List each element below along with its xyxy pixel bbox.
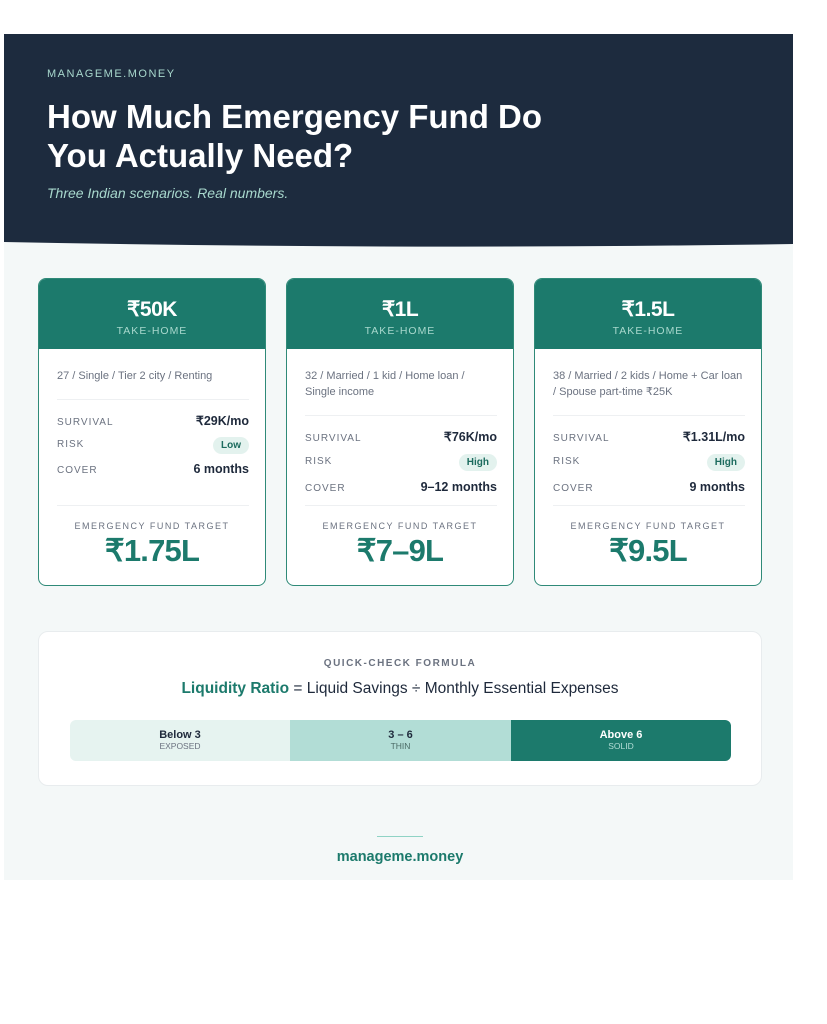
cover row: 9 months — [689, 480, 745, 494]
cover row — [305, 480, 497, 494]
risk row: RISK — [57, 439, 84, 450]
target label: EMERGENCY FUND TARGET — [570, 521, 726, 531]
cover row: COVER — [553, 483, 594, 494]
risk row: High — [467, 456, 489, 468]
card header — [287, 279, 513, 349]
description: 38 / Married / 2 kids / Home + Car loan / Spouse part-time ₹25K — [553, 370, 742, 398]
segment thin — [290, 720, 511, 761]
card header: TAKE-HOME — [117, 325, 187, 337]
segment solid — [511, 720, 731, 761]
survival row: SURVIVAL — [553, 433, 610, 444]
segment thin: 3 – 6 — [388, 729, 413, 741]
card header — [535, 279, 761, 349]
segment thin: THIN — [391, 741, 410, 751]
risk row: Low — [221, 440, 241, 450]
card header: ₹1.5L — [622, 298, 674, 321]
title: How Much Emergency Fund Do — [47, 98, 542, 135]
target value: ₹7–9L — [357, 533, 443, 568]
panel: card 50K — [38, 278, 266, 586]
segment solid: Above 6 — [600, 729, 642, 741]
segment exposed — [70, 720, 290, 761]
footer brand: manageme.money — [337, 849, 463, 865]
ratio scale bar — [70, 720, 731, 761]
target label: EMERGENCY FUND TARGET — [74, 521, 230, 531]
survival row: ₹76K/mo — [444, 430, 497, 444]
cover row: COVER — [57, 465, 98, 476]
risk row: RISK — [553, 456, 580, 467]
risk row: RISK — [305, 456, 332, 467]
cover row: COVER — [305, 483, 346, 494]
risk row — [305, 454, 497, 471]
segment solid: SOLID — [608, 741, 634, 751]
risk row — [553, 454, 745, 471]
survival row — [305, 430, 497, 444]
card header: TAKE-HOME — [365, 325, 435, 337]
survival row: SURVIVAL — [305, 433, 362, 444]
title — [47, 98, 542, 174]
card header: ₹1L — [382, 298, 418, 321]
card header: ₹50K — [127, 298, 177, 321]
target value: ₹9.5L — [609, 533, 687, 568]
cover row: 9–12 months — [421, 480, 497, 494]
risk row: High — [715, 456, 737, 468]
risk row — [57, 437, 249, 454]
title: You Actually Need? — [47, 137, 353, 174]
formula label: QUICK-CHECK FORMULA — [324, 658, 476, 669]
cover row — [57, 462, 249, 476]
page background — [4, 34, 793, 880]
survival row: SURVIVAL — [57, 417, 114, 428]
segment exposed: EXPOSED — [159, 741, 201, 751]
survival row: ₹29K/mo — [196, 414, 249, 428]
panel: card 1L — [286, 278, 514, 586]
cover row — [553, 480, 745, 494]
formula: Liquidity Ratio = Liquid Savings ÷ Monthly Essential Expenses — [181, 680, 619, 697]
survival row — [553, 430, 745, 444]
card header — [39, 279, 265, 349]
description: 32 / Married / 1 kid / Home loan / Single income — [305, 370, 465, 398]
description: 27 / Single / Tier 2 city / Renting — [57, 370, 212, 382]
cover row: 6 months — [193, 462, 249, 476]
panel: card 1.5L — [534, 278, 762, 586]
target label: EMERGENCY FUND TARGET — [322, 521, 478, 531]
segment exposed: Below 3 — [159, 729, 201, 741]
brand label: MANAGEME.MONEY — [47, 68, 176, 80]
card header: TAKE-HOME — [613, 325, 683, 337]
target value: ₹1.75L — [105, 533, 199, 568]
subtitle: Three Indian scenarios. Real numbers. — [47, 185, 288, 201]
survival row — [57, 414, 249, 428]
panel: formula — [38, 631, 762, 786]
header banner — [4, 34, 793, 247]
survival row: ₹1.31L/mo — [683, 430, 745, 444]
